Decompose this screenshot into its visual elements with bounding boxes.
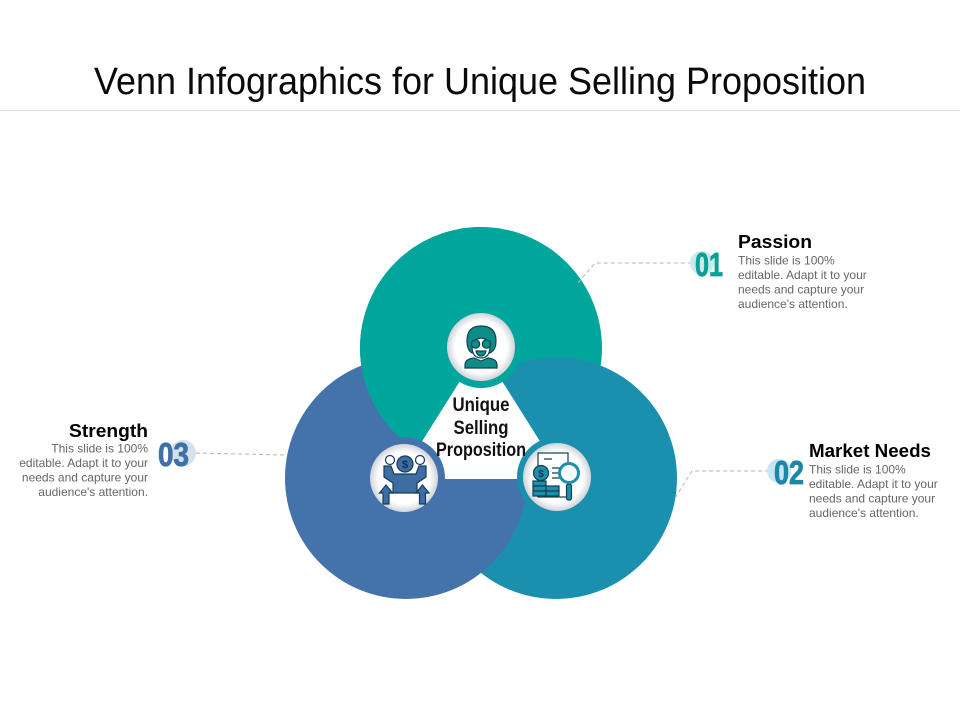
heading: passion: Passion: [738, 232, 812, 252]
icon ring: passion: [440, 306, 522, 388]
icon ring: market needs: [517, 437, 597, 517]
callout: strength: [19, 421, 285, 499]
circle: strength: [285, 357, 527, 599]
callout: passion: [578, 232, 867, 311]
number 03: 03: [158, 436, 189, 473]
icon disc: strength: [370, 444, 438, 512]
circle: passion: [360, 227, 602, 469]
text: market needs: audience's attention.: [809, 506, 919, 520]
center label: Proposition: [436, 439, 526, 461]
number 02: 02: [774, 454, 804, 491]
text: passion: editable. Adapt it to your: [738, 268, 867, 282]
text: market needs: [809, 462, 938, 520]
text: market needs: needs and capture your: [809, 492, 935, 506]
number 02: [767, 454, 804, 491]
text: market needs: This slide is 100%: [809, 462, 906, 476]
venn diagram: [285, 227, 677, 599]
icon: document, coins and magnifier: [533, 453, 578, 500]
number 01: 01: [695, 246, 723, 283]
center label: Unique: [452, 394, 510, 416]
heading: strength: Strength: [69, 421, 148, 441]
icon: businessman with arrows: $: [402, 459, 408, 471]
center white triangle: [421, 381, 541, 479]
icon: businessman with arrows: [380, 456, 429, 504]
icon ring: strength: [363, 437, 445, 519]
text: strength: audience's attention.: [38, 485, 148, 499]
heading: market needs: Market Needs: [809, 441, 931, 461]
text: strength: [19, 442, 148, 499]
title: Venn Infographics for Unique Selling Proposition: [94, 61, 866, 103]
text: passion: This slide is 100%: [738, 254, 835, 268]
icon: document, coins and magnifier: $: [538, 469, 544, 480]
number 01: [690, 246, 723, 283]
text: strength: This slide is 100%: [51, 442, 148, 456]
passion overlap over strength: [360, 227, 480, 442]
text: market needs: editable. Adapt it to your: [809, 477, 938, 491]
circle: market needs: [435, 357, 677, 599]
icon disc: market needs: [523, 443, 591, 511]
text: strength: editable. Adapt it to your: [19, 456, 148, 470]
icon: person with sunglasses: [465, 326, 497, 368]
center label: [436, 394, 526, 461]
text: passion: audience's attention.: [738, 297, 848, 311]
text: strength: needs and capture your: [22, 470, 148, 484]
icon disc: passion: [447, 313, 515, 381]
callout: market needs: [675, 441, 938, 520]
text: passion: [738, 254, 867, 311]
text: passion: needs and capture your: [738, 282, 864, 296]
center label: Selling: [454, 417, 508, 439]
